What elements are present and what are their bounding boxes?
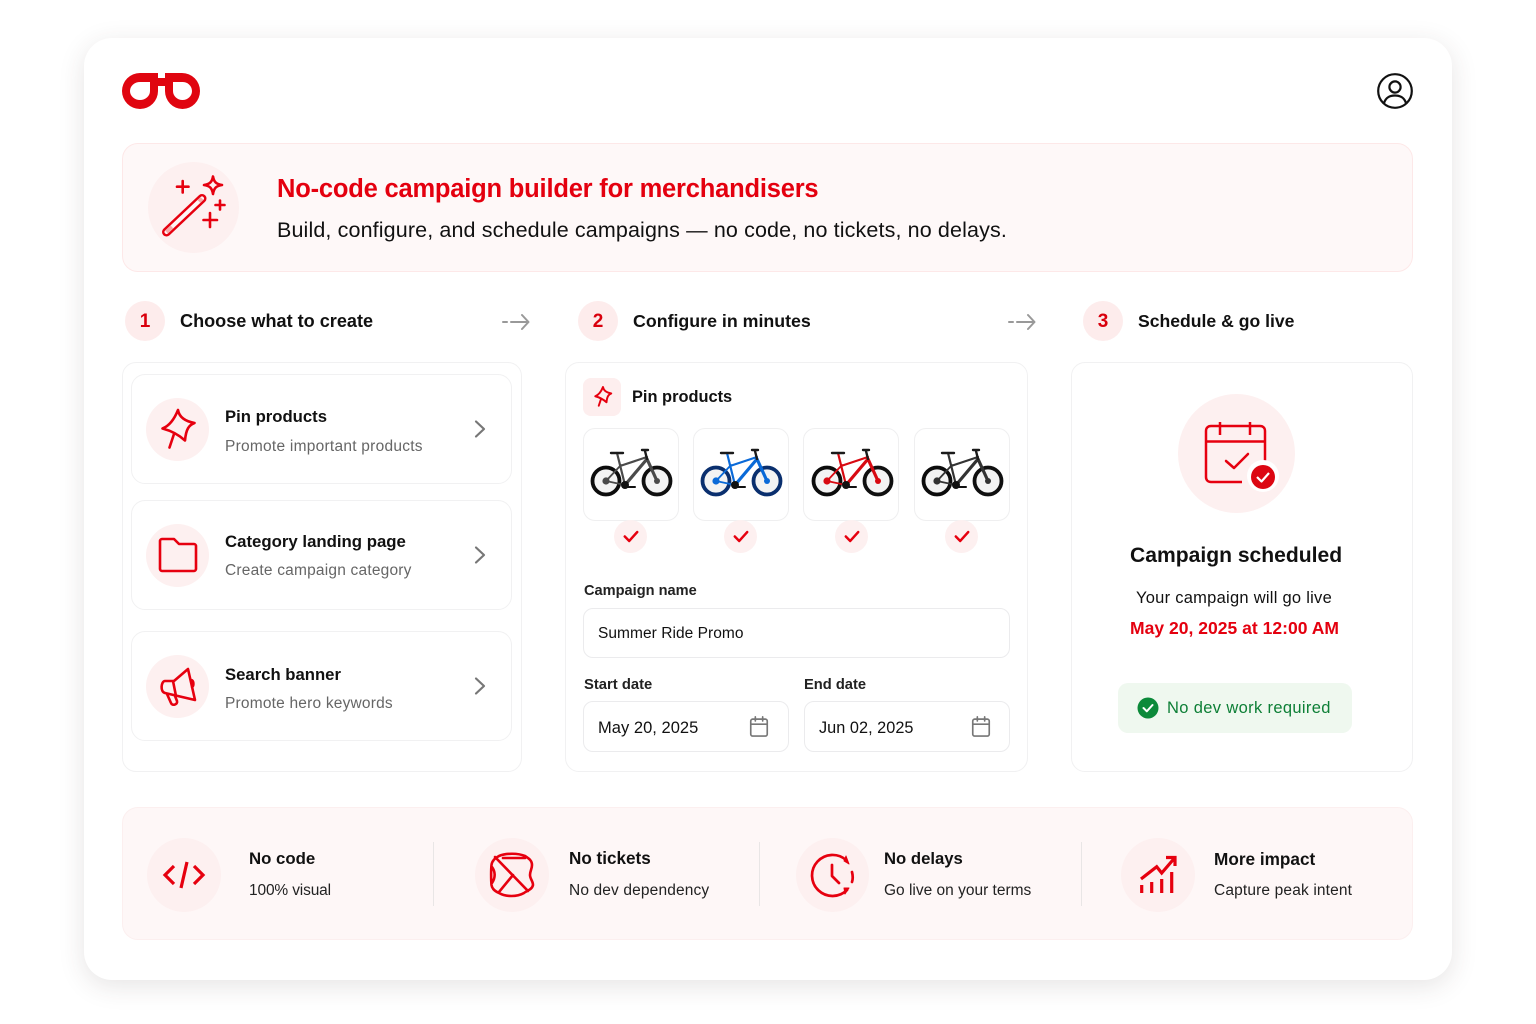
- panel: hero banner: [122, 143, 1413, 272]
- divider: [433, 842, 434, 906]
- product tile: blue bike: [693, 428, 789, 521]
- icon: clock: [796, 838, 869, 912]
- campaign name label: Campaign name: [584, 583, 697, 599]
- benefit: no delays: [810, 849, 1031, 899]
- step 3 heading: [1083, 301, 1294, 341]
- arrow: step 1 to step 2: [502, 314, 530, 330]
- badge: no dev work required: [1118, 683, 1352, 733]
- start date field: May 20, 2025: [598, 719, 698, 737]
- step 3 heading: 3: [1098, 311, 1108, 332]
- option: category landing page: [131, 500, 512, 610]
- check badge 2: [724, 520, 757, 553]
- step 1 heading: [125, 301, 373, 341]
- icon: small pin: [583, 378, 621, 416]
- product tile: black bike: [583, 428, 679, 521]
- benefit: no tickets: [490, 849, 710, 899]
- arrow: step 2 to step 3: [1008, 314, 1036, 330]
- benefit: more impact: [1140, 849, 1352, 899]
- step 2 heading: 2: [593, 311, 603, 332]
- schedule heading: Campaign scheduled: [1130, 544, 1342, 567]
- badge text: No dev work required: [1167, 699, 1331, 717]
- start date field: [583, 701, 789, 752]
- schedule text: Your campaign will go live: [1136, 589, 1332, 607]
- benefit title: More impact: [1214, 849, 1315, 869]
- configure heading: Pin products: [632, 388, 732, 406]
- option: search banner: [131, 631, 512, 741]
- option description: Promote important products: [225, 438, 423, 455]
- icon: calendar scheduled: [1178, 394, 1295, 513]
- step 1 heading: 1: [140, 311, 150, 332]
- step 1 heading: Choose what to create: [180, 311, 373, 331]
- campaign name field: [583, 608, 1010, 658]
- option title: Category landing page: [225, 532, 406, 551]
- logo: [122, 73, 200, 109]
- option description: Promote hero keywords: [225, 695, 393, 712]
- divider: [759, 842, 760, 906]
- schedule date: May 20, 2025 at 12:00 AM: [1130, 618, 1339, 638]
- icon: calendar: [750, 716, 768, 737]
- option title: Search banner: [225, 665, 341, 684]
- start date label: Start date: [584, 677, 652, 693]
- step 2 heading: [578, 301, 811, 341]
- icon: user profile: [1377, 73, 1413, 109]
- icon: magic wand: [148, 162, 239, 253]
- chevron: [474, 546, 486, 564]
- option description: Create campaign category: [225, 562, 412, 579]
- end date field: Jun 02, 2025: [819, 719, 914, 737]
- panel: schedule: [1071, 362, 1413, 772]
- icon: crossed ticket: [475, 838, 549, 912]
- benefit text: No dev dependency: [569, 882, 709, 899]
- product tile: dark bike: [914, 428, 1010, 521]
- check badge 1: [614, 520, 647, 553]
- option: pin products: [131, 374, 512, 484]
- campaign name field: Summer Ride Promo: [598, 625, 744, 642]
- end date field: [804, 701, 1010, 752]
- icon: megaphone: [146, 655, 209, 718]
- step 2 heading: Configure in minutes: [633, 311, 811, 331]
- benefit title: No delays: [884, 849, 963, 868]
- product tile: red bike: [803, 428, 899, 521]
- benefit text: Capture peak intent: [1214, 882, 1352, 899]
- icon: folder: [146, 524, 209, 587]
- benefit text: Go live on your terms: [884, 882, 1031, 899]
- panel: benefits strip: [122, 807, 1413, 940]
- end date label: End date: [804, 677, 866, 693]
- icon: green check: [1138, 698, 1158, 718]
- hero subtitle: Build, configure, and schedule campaigns — no code, no tickets, no delays.: [277, 218, 1007, 242]
- benefit text: 100% visual: [249, 882, 331, 899]
- step 3 heading: Schedule & go live: [1138, 311, 1294, 331]
- chevron: [474, 677, 486, 695]
- panel: choose what to create: [122, 362, 522, 772]
- option title: Pin products: [225, 407, 327, 426]
- divider: [1081, 842, 1082, 906]
- heading: hero title: No-code campaign builder for merchandisers: [277, 175, 818, 203]
- panel: configure: [565, 362, 1028, 772]
- icon: calendar: [972, 716, 990, 737]
- benefit title: No code: [249, 849, 315, 868]
- icon: growth chart: [1121, 838, 1195, 912]
- benefit: no code: [162, 849, 331, 899]
- check badge 3: [835, 520, 868, 553]
- icon: code: [147, 838, 221, 912]
- benefit title: No tickets: [569, 849, 651, 868]
- check badge 4: [945, 520, 978, 553]
- icon: pin: [146, 398, 209, 461]
- chevron: [474, 420, 486, 438]
